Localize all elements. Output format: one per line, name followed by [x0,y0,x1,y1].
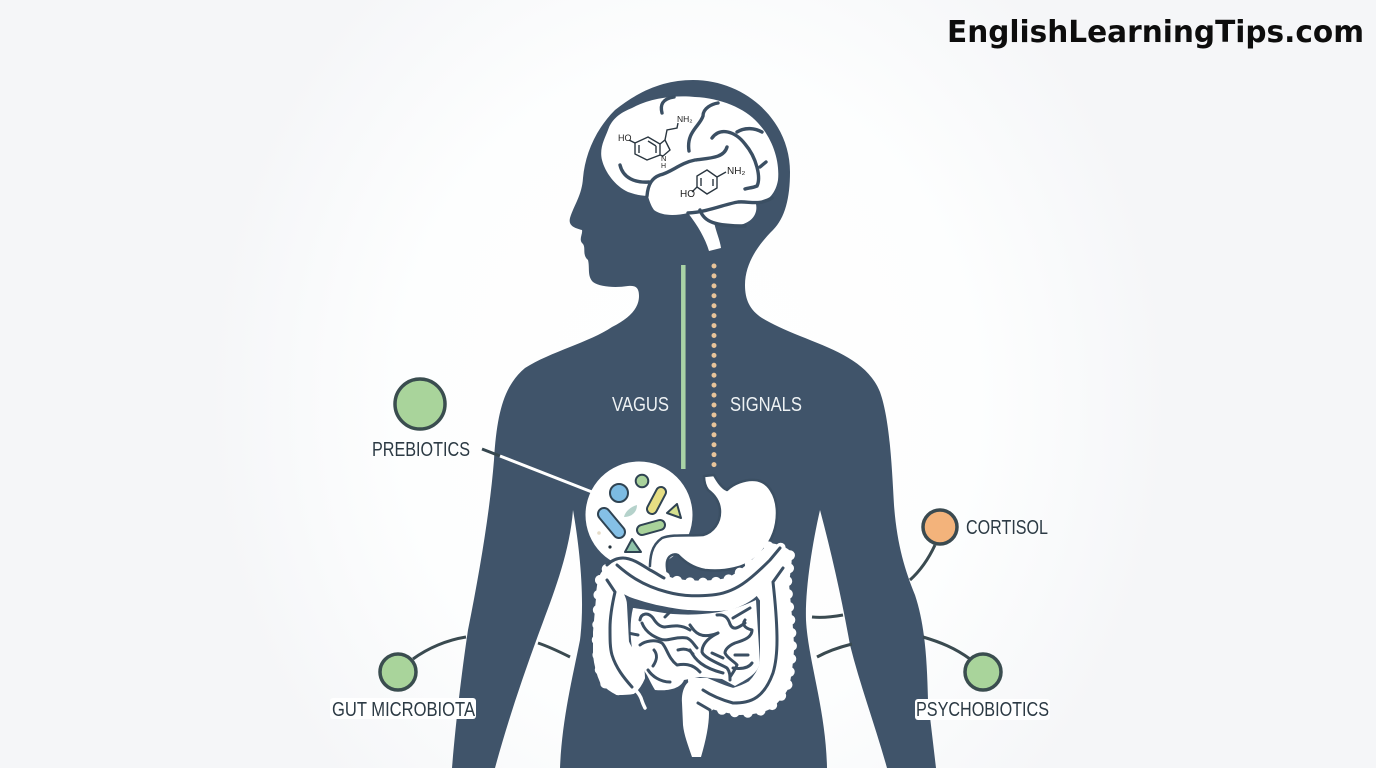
blue rod microbe [604,514,619,532]
appendix [633,688,645,708]
molecule: serotonin: N [661,154,666,163]
cortisol label: CORTISOL [966,517,1048,539]
blue round microbe [610,484,628,502]
molecule: dopamine [680,166,745,200]
molecule: serotonin: HO [618,133,632,143]
label: vagus: VAGUS [612,394,669,416]
molecule: dopamine: HO [680,189,695,200]
prebiotics node [395,379,445,429]
brain folds [620,97,772,226]
colon scallops [600,545,792,713]
psychobiotics node [965,654,1001,690]
vagus nerve line [681,265,686,469]
molecule: serotonin [618,114,693,170]
molecule: serotonin: H [661,163,666,170]
green round microbe [636,475,648,487]
cortisol node [923,510,957,544]
signals dotted line [712,266,716,472]
brain lobes [601,96,778,251]
tiny dots [597,531,612,549]
psychobiotics label: PSYCHOBIOTICS [916,699,1049,721]
small intestine [628,600,760,690]
yellow rod microbe [652,492,661,509]
brain [601,96,778,251]
yellow triangle microbe [667,504,681,518]
green rod microbe [642,525,660,530]
microbiota circle [586,462,692,568]
molecule: serotonin: NH₂ [677,114,693,124]
pale leaf microbe [624,505,637,517]
gut microbiota connector [413,637,570,659]
stomach [650,475,777,580]
teal triangle microbe [625,539,641,552]
psychobiotics connector [812,615,970,659]
colon inner lines [607,548,783,710]
colon body [595,545,792,713]
intestine folds [628,608,752,682]
large intestine [595,545,792,757]
gut microbiota node [380,654,416,690]
molecule: dopamine: NH₂ [727,166,745,177]
gut microbiota label: GUT MICROBIOTA [332,699,476,721]
rectum [682,679,709,757]
cortisol connector [910,545,935,580]
prebiotics leader line [482,449,592,492]
site name header: EnglishLearningTips.com [947,15,1364,50]
label: signals: SIGNALS [730,394,802,416]
colon left scallops [597,580,633,691]
human body silhouette [452,80,936,768]
prebiotics label: PREBIOTICS [372,439,470,461]
